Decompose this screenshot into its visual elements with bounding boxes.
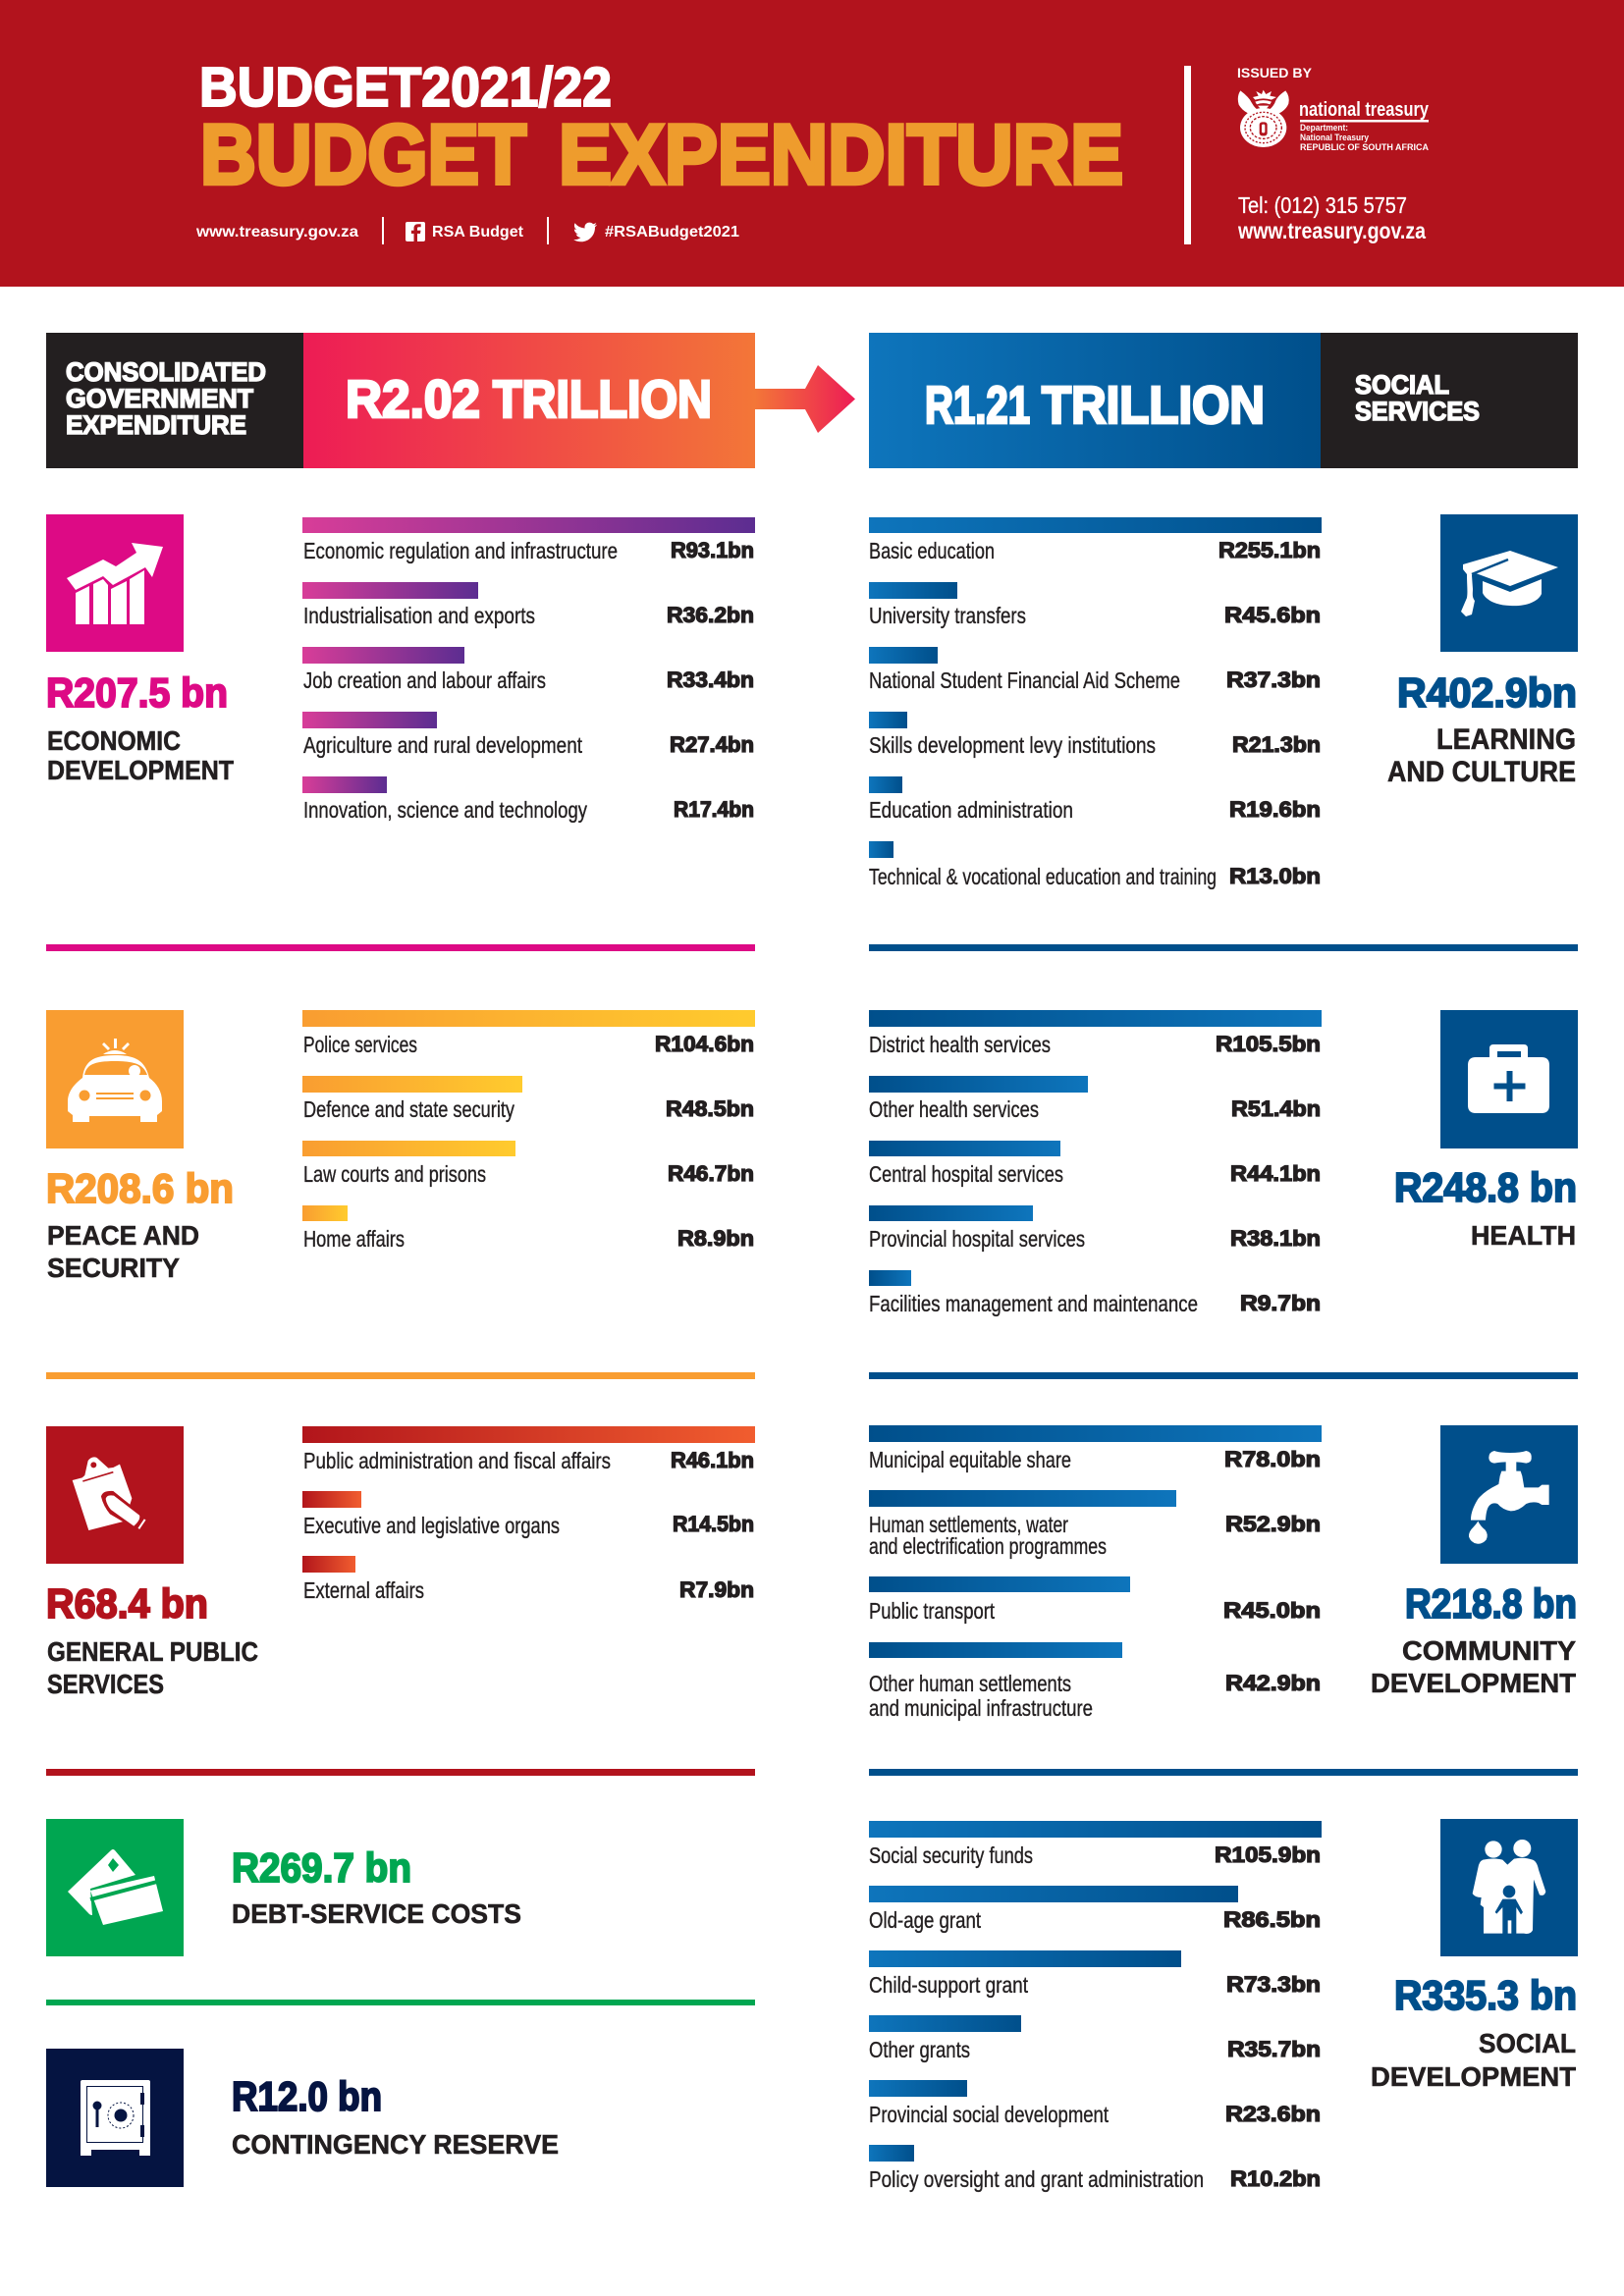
- icon: family: [1440, 1819, 1578, 1956]
- row: job creation: [302, 647, 754, 693]
- department line: Department:: [1300, 123, 1348, 133]
- consolidated label: GOVERNMENT: [66, 384, 253, 413]
- social services amount: [925, 376, 1265, 435]
- bar chart: peace and security: [302, 1010, 755, 1252]
- panel: general public services: [46, 1426, 755, 1699]
- row: university transfers: R45.6bn: [1224, 603, 1321, 627]
- row: district health: District health services: [869, 1032, 1051, 1057]
- icon: twitter bird: [573, 223, 597, 241]
- social services label: [1355, 370, 1480, 426]
- row: social security funds: R105.9bn: [1215, 1842, 1321, 1867]
- row: public administration: [302, 1426, 755, 1473]
- row: public administration: Public administration and fiscal affairs: [303, 1448, 611, 1473]
- web address: www.treasury.gov.za: [1237, 218, 1426, 243]
- social services amount: TRILLION: [1042, 376, 1265, 435]
- row: skills development: Skills development levy institutions: [869, 732, 1156, 758]
- panel: social services total: [869, 333, 1578, 468]
- social services amount: R1.21: [925, 376, 1030, 435]
- name: DEBT-SERVICE COSTS: [232, 1898, 521, 1929]
- amount: R68.4 bn: [46, 1580, 208, 1627]
- row: executive: Executive and legislative organs: [303, 1513, 560, 1538]
- bar chart: community development: [869, 1425, 1322, 1721]
- name: [1371, 2028, 1576, 2092]
- icon: police car: [46, 1010, 184, 1148]
- title: Budget Expenditure: BUDGET: [200, 108, 526, 202]
- row: nsfas: [869, 647, 1321, 693]
- row: technical and vocational: Technical & vocational education and training: [869, 864, 1217, 889]
- row: other grants: [869, 2015, 1321, 2062]
- consolidated amount: R2.02: [346, 370, 480, 429]
- row: defence: Defence and state security: [303, 1096, 514, 1122]
- row: education administration: R19.6bn: [1229, 797, 1321, 822]
- row: law courts: Law courts and prisons: [303, 1161, 486, 1187]
- row: technical and vocational: [869, 841, 1321, 889]
- arrow: [755, 365, 855, 433]
- row: other health: [869, 1076, 1321, 1122]
- row: defence: R48.5bn: [666, 1096, 754, 1121]
- row: industrialisation: R36.2bn: [667, 603, 754, 627]
- row: old-age grant: Old-age grant: [869, 1907, 981, 1933]
- amount: R207.5 bn: [46, 669, 228, 716]
- row: public administration: R46.1bn: [671, 1448, 754, 1472]
- icon: first aid kit: [1440, 1010, 1578, 1148]
- social services label: SOCIAL: [1355, 370, 1449, 400]
- name: [47, 1636, 258, 1699]
- title: Budget Expenditure: [200, 108, 1123, 202]
- row: municipal equitable share: R78.0bn: [1224, 1447, 1321, 1471]
- row: economic regulation: R93.1bn: [671, 538, 754, 562]
- name: SOCIAL: [1479, 2028, 1576, 2058]
- row: human settlements: R52.9bn: [1225, 1512, 1321, 1536]
- treasury line: National Treasury: [1300, 133, 1369, 142]
- row: education administration: [869, 776, 1321, 823]
- panel: economic development: [46, 514, 755, 823]
- name: ECONOMIC: [47, 725, 181, 756]
- name: [1371, 1635, 1576, 1698]
- name: GENERAL PUBLIC: [47, 1636, 258, 1667]
- title: Budget Expenditure: EXPENDITURE: [559, 108, 1123, 202]
- facebook label: RSA Budget: [432, 224, 524, 240]
- row: public transport: Public transport: [869, 1598, 995, 1624]
- amount: R12.0 bn: [232, 2073, 382, 2119]
- consolidated label: EXPENDITURE: [66, 410, 246, 440]
- name: COMMUNITY: [1402, 1635, 1576, 1666]
- row: provincial hospital: R38.1bn: [1230, 1226, 1321, 1251]
- amount: R208.6 bn: [46, 1165, 234, 1211]
- issued by: ISSUED BY: [1237, 65, 1313, 80]
- name: [1387, 723, 1576, 788]
- row: basic education: Basic education: [869, 538, 995, 563]
- row: home affairs: Home affairs: [303, 1226, 405, 1252]
- consolidated label: [66, 357, 266, 440]
- row: other grants: R35.7bn: [1227, 2037, 1321, 2061]
- row: public transport: R45.0bn: [1223, 1598, 1321, 1623]
- name: DEVELOPMENT: [1371, 2061, 1576, 2092]
- name: [47, 725, 234, 785]
- name: LEARNING: [1436, 723, 1576, 756]
- row: economic regulation: [302, 517, 755, 563]
- republic line: REPUBLIC OF SOUTH AFRICA: [1300, 142, 1429, 152]
- name: DEVELOPMENT: [1371, 1668, 1576, 1698]
- row: facilities management: [869, 1270, 1321, 1316]
- row: provincial social development: Provincial social development: [869, 2102, 1109, 2127]
- row: social security funds: Social security funds: [869, 1842, 1033, 1868]
- row: social security funds: [869, 1821, 1322, 1868]
- icon: graduation cap: [1440, 514, 1578, 652]
- row: old-age grant: [869, 1886, 1321, 1933]
- row: industrialisation: [302, 582, 754, 628]
- national treasury wordmark: national treasury: [1299, 99, 1430, 121]
- row: agriculture: Agriculture and rural development: [303, 732, 582, 758]
- row: skills development: R21.3bn: [1232, 732, 1321, 757]
- amount: R269.7 bn: [232, 1844, 411, 1891]
- row: external affairs: R7.9bn: [679, 1577, 754, 1602]
- icon: national crest: [1238, 90, 1289, 147]
- row: technical and vocational: R13.0bn: [1229, 864, 1321, 888]
- amount: R218.8 bn: [1405, 1580, 1577, 1627]
- icon: facebook: [406, 222, 425, 241]
- icon: rising chart: [46, 514, 184, 652]
- row: industrialisation: Industrialisation and exports: [303, 603, 535, 628]
- row: home affairs: [302, 1205, 754, 1252]
- row: provincial hospital: [869, 1205, 1321, 1252]
- row: job creation: R33.4bn: [667, 667, 754, 692]
- row: district health: [869, 1010, 1322, 1057]
- amount: R335.3 bn: [1394, 1972, 1577, 2018]
- bar chart: general public services: [302, 1426, 755, 1603]
- name: SECURITY: [47, 1253, 180, 1283]
- row: defence: [302, 1076, 754, 1122]
- consolidated amount: [346, 370, 712, 429]
- row: basic education: R255.1bn: [1218, 538, 1321, 562]
- row: facilities management: Facilities management and maintenance: [869, 1291, 1198, 1316]
- row: external affairs: [302, 1556, 754, 1603]
- row: nsfas: National Student Financial Aid Scheme: [869, 667, 1180, 693]
- consolidated label: CONSOLIDATED: [66, 357, 266, 387]
- row: human settlements: Human settlements, water: [869, 1512, 1068, 1537]
- row: executive: [302, 1491, 754, 1538]
- row: agriculture: R27.4bn: [670, 732, 754, 757]
- name: PEACE AND: [47, 1220, 199, 1251]
- row: human settlements: and electrification programmes: [869, 1533, 1107, 1559]
- row: facilities management: R9.7bn: [1240, 1291, 1321, 1315]
- panel: peace and security: [46, 1010, 755, 1283]
- row: other human settlements: Other human settlements: [869, 1671, 1071, 1696]
- name: [47, 1220, 199, 1283]
- header banner: [0, 0, 1624, 287]
- name: DEVELOPMENT: [47, 755, 234, 785]
- row: innovation: [302, 776, 754, 823]
- row: provincial social development: [869, 2080, 1321, 2127]
- row: other human settlements: and municipal infrastructure: [869, 1695, 1093, 1721]
- row: central hospital: R44.1bn: [1230, 1161, 1321, 1186]
- row: municipal equitable share: [869, 1425, 1322, 1472]
- name: AND CULTURE: [1387, 756, 1576, 788]
- name: HEALTH: [1471, 1220, 1576, 1251]
- row: university transfers: University transfers: [869, 603, 1026, 628]
- row: policy oversight: Policy oversight and grant administration: [869, 2166, 1204, 2192]
- row: other health: R51.4bn: [1231, 1096, 1321, 1121]
- row: policy oversight: R10.2bn: [1230, 2166, 1321, 2191]
- row: public transport: [869, 1576, 1321, 1624]
- row: law courts: R46.7bn: [668, 1161, 754, 1186]
- row: other human settlements: R42.9bn: [1225, 1671, 1321, 1695]
- row: economic regulation: Economic regulation and infrastructure: [303, 538, 618, 563]
- row: provincial hospital: Provincial hospital services: [869, 1226, 1085, 1252]
- panel: social development: [869, 1819, 1578, 2192]
- row: nsfas: R37.3bn: [1226, 667, 1321, 692]
- panel: health: [869, 1010, 1578, 1316]
- bar chart: health: [869, 1010, 1322, 1316]
- row: child-support grant: Child-support grant: [869, 1972, 1028, 1998]
- panel: debt-service costs: [46, 1819, 521, 1956]
- row: home affairs: R8.9bn: [677, 1226, 754, 1251]
- row: job creation: Job creation and labour affairs: [303, 667, 546, 693]
- row: skills development: [869, 712, 1321, 758]
- bar chart: learning and culture: [869, 517, 1322, 889]
- row: central hospital: Central hospital services: [869, 1161, 1063, 1187]
- row: innovation: R17.4bn: [674, 797, 754, 822]
- icon: water tap: [1440, 1425, 1578, 1564]
- bar chart: social development: [869, 1821, 1322, 2192]
- twitter hashtag: #RSABudget2021: [605, 224, 739, 240]
- icon: clipboard and pen: [46, 1426, 184, 1564]
- icon: payment cards: [46, 1819, 184, 1956]
- row: education administration: Education administration: [869, 797, 1073, 823]
- row: municipal equitable share: Municipal equitable share: [869, 1447, 1071, 1472]
- name: CONTINGENCY RESERVE: [232, 2129, 559, 2160]
- row: district health: R105.5bn: [1216, 1032, 1321, 1056]
- row: other human settlements: [869, 1642, 1321, 1721]
- row: central hospital: [869, 1141, 1321, 1187]
- telephone: Tel: (012) 315 5757: [1238, 192, 1407, 218]
- amount: R248.8 bn: [1394, 1164, 1577, 1210]
- row: law courts: [302, 1141, 754, 1187]
- panel: learning and culture: [869, 514, 1578, 889]
- row: agriculture: [302, 712, 754, 758]
- row: other health: Other health services: [869, 1096, 1039, 1122]
- row: basic education: [869, 517, 1322, 563]
- website link: www.treasury.gov.za: [195, 224, 358, 240]
- amount: R402.9bn: [1397, 669, 1577, 716]
- panel: community development: [869, 1425, 1578, 1721]
- panel: contingency reserve: [46, 2049, 559, 2187]
- icon: safe: [46, 2049, 184, 2187]
- row: provincial social development: R23.6bn: [1225, 2102, 1321, 2126]
- name: SERVICES: [47, 1669, 164, 1699]
- panel: consolidated government expenditure total: [46, 333, 755, 468]
- consolidated amount: TRILLION: [493, 370, 712, 429]
- row: executive: R14.5bn: [673, 1512, 754, 1536]
- row: policy oversight: [869, 2145, 1321, 2192]
- row: other grants: Other grants: [869, 2037, 970, 2062]
- row: university transfers: [869, 582, 1321, 628]
- row: old-age grant: R86.5bn: [1223, 1907, 1321, 1932]
- row: child-support grant: [869, 1950, 1321, 1998]
- row: innovation: Innovation, science and technology: [303, 797, 587, 823]
- row: child-support grant: R73.3bn: [1226, 1972, 1321, 1997]
- row: police services: R104.6bn: [655, 1032, 754, 1056]
- social services label: SERVICES: [1355, 397, 1480, 426]
- title: Budget 2021/22: BUDGET2021/22: [199, 56, 612, 119]
- bar chart: economic development: [302, 517, 755, 823]
- row: police services: Police services: [303, 1032, 417, 1057]
- row: police services: [302, 1010, 755, 1057]
- row: human settlements: [869, 1490, 1321, 1559]
- row: external affairs: External affairs: [303, 1577, 424, 1603]
